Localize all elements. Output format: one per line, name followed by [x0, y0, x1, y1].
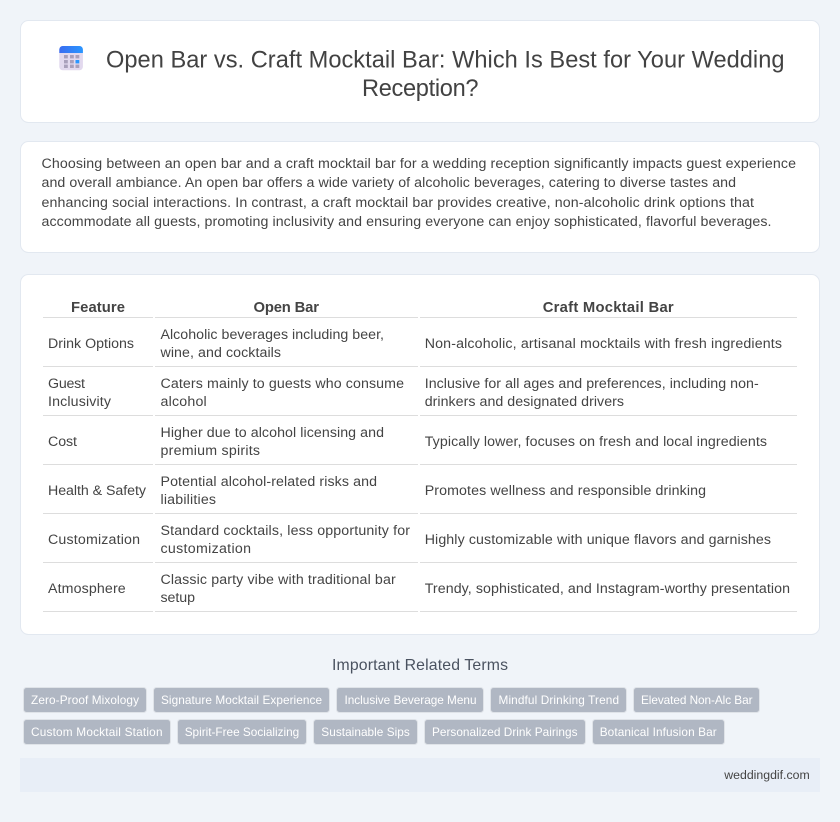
tag: Custom Mocktail Station: Custom Mocktail Station	[31, 725, 162, 739]
table row: atmosphere	[43, 572, 797, 612]
table row: cost: premium spirits	[160, 443, 260, 459]
table row: guest inclusivity: drinkers and designated drivers	[425, 394, 624, 410]
tag: Personalized Drink Pairings	[424, 720, 586, 744]
table row: cost: Higher due to alcohol licensing and	[160, 425, 384, 441]
tag: Zero-Proof Mixology: Zero-Proof Mixology	[31, 693, 139, 707]
table row: health and safety	[43, 474, 797, 514]
table row: guest inclusivity: Guest	[48, 376, 85, 392]
title: Reception?	[362, 76, 478, 102]
table row: guest inclusivity: Inclusive for all ages and preferences, including non-	[425, 376, 759, 392]
table row: health and safety: liabilities	[160, 492, 216, 508]
heading: important related terms: Important Related Terms	[332, 657, 508, 674]
tag: Personalized Drink Pairings: Personalized Drink Pairings	[432, 725, 578, 739]
text block: introduction paragraph: enhancing social interactions. In contrast, a craft mocktail bar provides creative, non-alcoholic drink options that	[42, 195, 754, 211]
table header row	[43, 300, 797, 318]
table row: atmosphere: Trendy, sophisticated, and Instagram-worthy presentation	[425, 581, 790, 597]
tag: Botanical Infusion Bar	[592, 720, 724, 744]
table row: health and safety: Promotes wellness and responsible drinking	[425, 483, 706, 499]
table row: drink options: Drink Options	[48, 336, 134, 352]
panel: introduction	[20, 142, 820, 252]
tag: Sustainable Sips	[314, 720, 418, 744]
tag: Botanical Infusion Bar: Botanical Infusion Bar	[600, 725, 717, 739]
table row: cost: Typically lower, focuses on fresh and local ingredients	[425, 434, 767, 450]
table header row: Craft Mocktail Bar	[543, 300, 674, 316]
table row: guest inclusivity	[43, 376, 797, 416]
tag: Sustainable Sips: Sustainable Sips	[321, 725, 410, 739]
tag: Inclusive Beverage Menu: Inclusive Beverage Menu	[344, 693, 476, 707]
tag: Zero-Proof Mixology	[24, 688, 146, 712]
table row: customization	[43, 523, 797, 563]
title	[106, 48, 784, 102]
table row: cost	[43, 425, 797, 465]
table row: health and safety: Potential alcohol-related risks and	[160, 474, 377, 490]
icon: calendar	[59, 46, 83, 70]
table row: customization: Highly customizable with unique flavors and garnishes	[425, 532, 771, 548]
table row: guest inclusivity: alcohol	[160, 394, 207, 410]
tag: Elevated Non-Alc Bar	[634, 688, 760, 712]
tag: Inclusive Beverage Menu	[336, 688, 484, 712]
panel: comparison table	[20, 274, 820, 634]
tag: Mindful Drinking Trend	[490, 688, 626, 712]
tag: Custom Mocktail Station	[24, 720, 170, 744]
text block: introduction paragraph: Choosing between an open bar and a craft mocktail bar for a wedding reception significantly impacts guest experience	[42, 156, 796, 172]
panel: header	[20, 20, 820, 122]
table row: cost: Cost	[48, 434, 77, 450]
table row: customization: Standard cocktails, less opportunity for	[160, 523, 410, 539]
table row: health and safety: Health & Safety	[48, 483, 147, 499]
table row: drink options	[43, 327, 797, 367]
tag: Signature Mocktail Experience	[154, 688, 330, 712]
table header row: Open Bar	[254, 300, 319, 316]
table row: customization: Customization	[48, 532, 140, 548]
tag: Spirit-Free Socializing	[178, 720, 306, 744]
text block: introduction paragraph: accommodate all guests, promoting inclusivity and ensuring everyone can enjoy sophisticated, flavorful beverages.	[42, 214, 772, 230]
tag: Elevated Non-Alc Bar: Elevated Non-Alc Bar	[641, 693, 753, 707]
table row: atmosphere: Atmosphere	[48, 581, 126, 597]
tag: Mindful Drinking Trend: Mindful Drinking Trend	[498, 693, 619, 707]
tag: Signature Mocktail Experience: Signature Mocktail Experience	[161, 693, 322, 707]
table row: atmosphere: Classic party vibe with traditional bar	[160, 572, 396, 588]
table row: drink options: Alcoholic beverages including beer,	[160, 327, 384, 343]
footer	[20, 758, 820, 792]
table row: guest inclusivity: Inclusivity	[48, 394, 112, 410]
table header row: Feature	[71, 300, 125, 316]
tag: Spirit-Free Socializing: Spirit-Free Socializing	[185, 725, 299, 739]
table row: customization: customization	[160, 541, 251, 557]
table row: drink options: Non-alcoholic, artisanal mocktails with fresh ingredients	[425, 336, 782, 352]
tag group: related terms	[24, 688, 760, 744]
footer: weddingdif.com	[723, 768, 810, 782]
table row: guest inclusivity: Caters mainly to guests who consume	[160, 376, 404, 392]
text block: introduction paragraph: and overall ambiance. An open bar offers a wide variety of alcoholic beverages, catering to diverse tastes and	[42, 175, 736, 191]
table row: drink options: wine, and cocktails	[160, 345, 281, 361]
title: Open Bar vs. Craft Mocktail Bar: Which Is Best for Your Wedding	[106, 48, 784, 74]
table row: atmosphere: setup	[160, 590, 195, 606]
text block: introduction paragraph	[42, 156, 796, 230]
